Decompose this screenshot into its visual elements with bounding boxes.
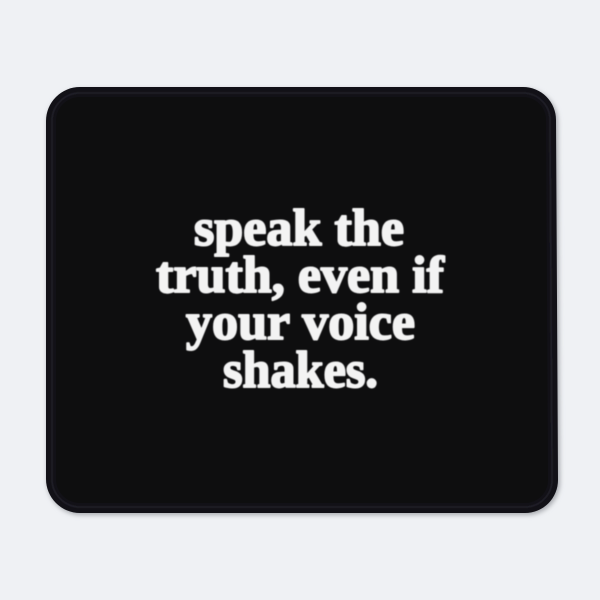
quote text: shakes. — [223, 342, 378, 399]
quote text: truth, even if — [156, 247, 445, 304]
mat shadow — [47, 89, 560, 515]
quote text: your voice — [186, 294, 415, 351]
quote text — [156, 200, 445, 399]
mouse mat — [46, 87, 558, 513]
quote text: speak the — [194, 200, 404, 257]
